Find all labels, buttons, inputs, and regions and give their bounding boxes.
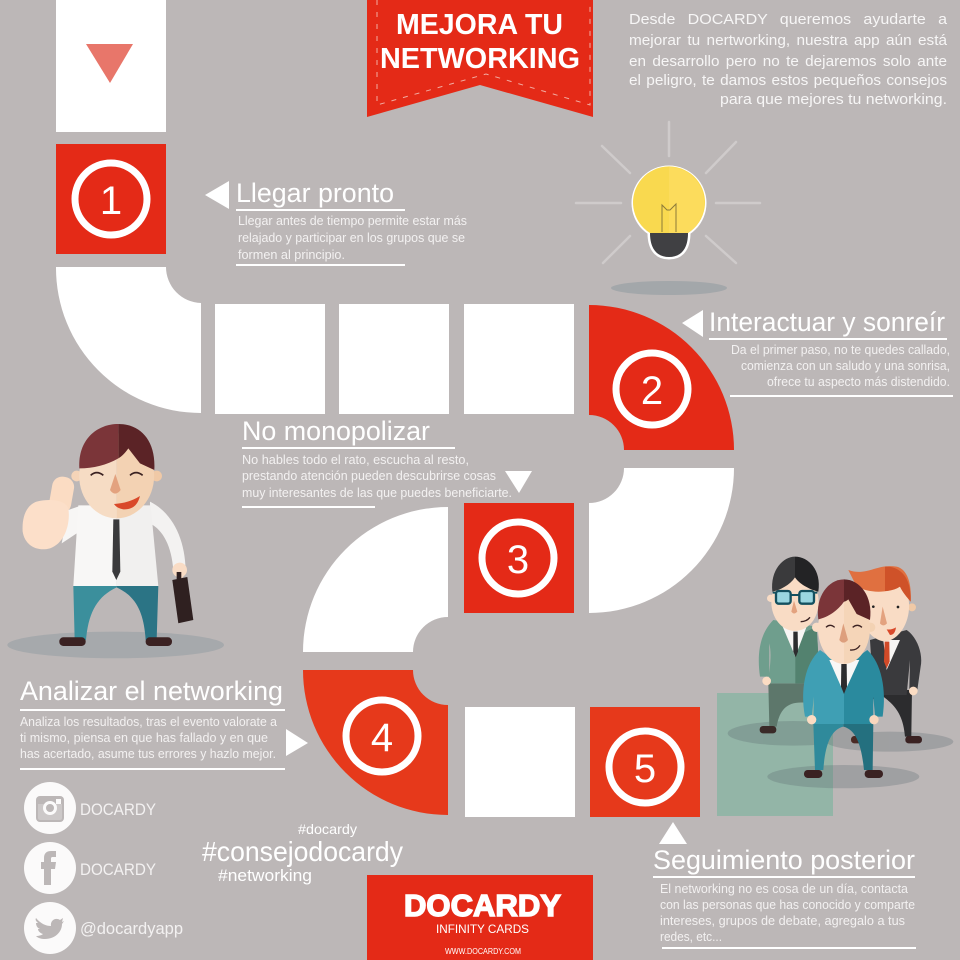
- icon: twitter: [24, 902, 76, 954]
- step 3 tile: [464, 503, 574, 613]
- arrow: [286, 729, 308, 756]
- step 4 text: ti mismo, piensa en que has fallado y en que: [20, 731, 268, 745]
- intro text: el peligro, te damos estos pequeños consejos: [629, 73, 947, 89]
- step 1 text: [205, 178, 467, 266]
- step 1 text: Llegar pronto: [236, 178, 394, 208]
- title banner: [367, 0, 593, 117]
- step 5 tile: 5: [634, 747, 656, 791]
- step 2 text: [682, 307, 953, 397]
- step 4 tile: 4: [371, 716, 393, 760]
- step 2 text: Da el primer paso, no te quedes callado,: [731, 343, 950, 357]
- step 4 text: Analizar el networking: [20, 676, 283, 706]
- board path: [56, 0, 734, 817]
- step 2 text: comienza con un saludo y una sonrisa,: [741, 359, 950, 373]
- step 2 text: Interactuar y sonreír: [709, 307, 945, 337]
- step 5 text: Seguimiento posterior: [653, 845, 915, 875]
- step 4 text: [20, 676, 308, 770]
- illustration: green square behind group: [717, 693, 833, 816]
- hashtags: #docardy: [298, 821, 357, 837]
- hashtags: [202, 821, 403, 885]
- curve tile 2: [589, 468, 734, 613]
- icon: light bulb: [576, 122, 760, 295]
- intro text: en desarrollo pero no te dejaremos solo ante: [629, 54, 947, 70]
- social links: [24, 782, 183, 954]
- illustration: business group: [728, 557, 953, 788]
- arrow: [682, 310, 703, 337]
- social links: DOCARDY: [80, 861, 156, 879]
- step 3 text: No monopolizar: [242, 416, 430, 446]
- step 3 text: muy interesantes de las que puedes beneficiarte.: [242, 486, 512, 500]
- icon: facebook: [24, 842, 76, 894]
- intro text: mejorar tu nertworking, nuestra app aún está: [629, 33, 948, 49]
- step 5 text: [653, 822, 916, 949]
- step 2 tile: 2: [641, 369, 663, 413]
- title banner: MEJORA TU: [396, 9, 563, 41]
- icon: instagram: [24, 782, 76, 834]
- arrow: [205, 181, 229, 209]
- step 4 text: has acertado, asume tus errores y hazlo mejor.: [20, 747, 276, 761]
- person: front teal suit: [803, 579, 884, 778]
- title banner: NETWORKING: [380, 43, 580, 75]
- step 1 tile: 1: [100, 179, 122, 223]
- step 5 text: intereses, grupos de debate, agregalo a tus: [660, 914, 905, 928]
- step 4 text: Analiza los resultados, tras el evento valorate a: [20, 715, 277, 729]
- social links: @docardyapp: [80, 920, 183, 938]
- intro text: [629, 12, 948, 108]
- arrow: [659, 822, 687, 844]
- footer logo: INFINITY CARDS: [436, 922, 529, 936]
- start tile: [56, 0, 166, 132]
- blank tiles row: [215, 304, 574, 414]
- hashtags: #networking: [218, 866, 312, 885]
- arrow: [505, 471, 532, 493]
- curve tile 3: [303, 507, 448, 652]
- illustration: man thumbs up: [7, 424, 224, 658]
- step 5 text: El networking no es cosa de un día, contacta: [660, 882, 908, 896]
- curve tile 1: [56, 267, 201, 413]
- intro text: Desde DOCARDY queremos ayudarte a: [629, 12, 948, 28]
- person: left green suit: [759, 557, 820, 733]
- person: right dark suit: [848, 566, 922, 743]
- footer logo: DOCARDY: [404, 888, 561, 923]
- step 5 text: con las personas que has conocido y comparte: [660, 898, 915, 912]
- step 5 text: redes, etc...: [660, 930, 722, 944]
- step 1 tile: [56, 144, 166, 254]
- blank tile: [465, 707, 575, 817]
- step 1 text: formen al principio.: [238, 248, 345, 262]
- intro text: para que mejores tu networking.: [720, 92, 947, 108]
- step 5 tile: [590, 707, 700, 817]
- footer logo: WWW.DOCARDY.COM: [445, 947, 521, 956]
- hashtags: #consejodocardy: [202, 836, 403, 867]
- step 1 text: relajado y participar en los grupos que se: [238, 231, 465, 245]
- step 3 text: No hables todo el rato, escucha al resto,: [242, 453, 469, 467]
- step 2 text: ofrece tu aspecto más distendido.: [767, 375, 950, 389]
- step 3 tile: 3: [507, 538, 529, 582]
- step 3 text: [242, 416, 532, 508]
- step 1 text: Llegar antes de tiempo permite estar más: [238, 214, 467, 228]
- footer logo: [367, 875, 593, 960]
- step 4 tile: [303, 670, 448, 815]
- social links: DOCARDY: [80, 801, 156, 819]
- step 3 text: prestando atención pueden descubrirse cosas: [242, 469, 496, 483]
- step 2 tile: [589, 305, 734, 450]
